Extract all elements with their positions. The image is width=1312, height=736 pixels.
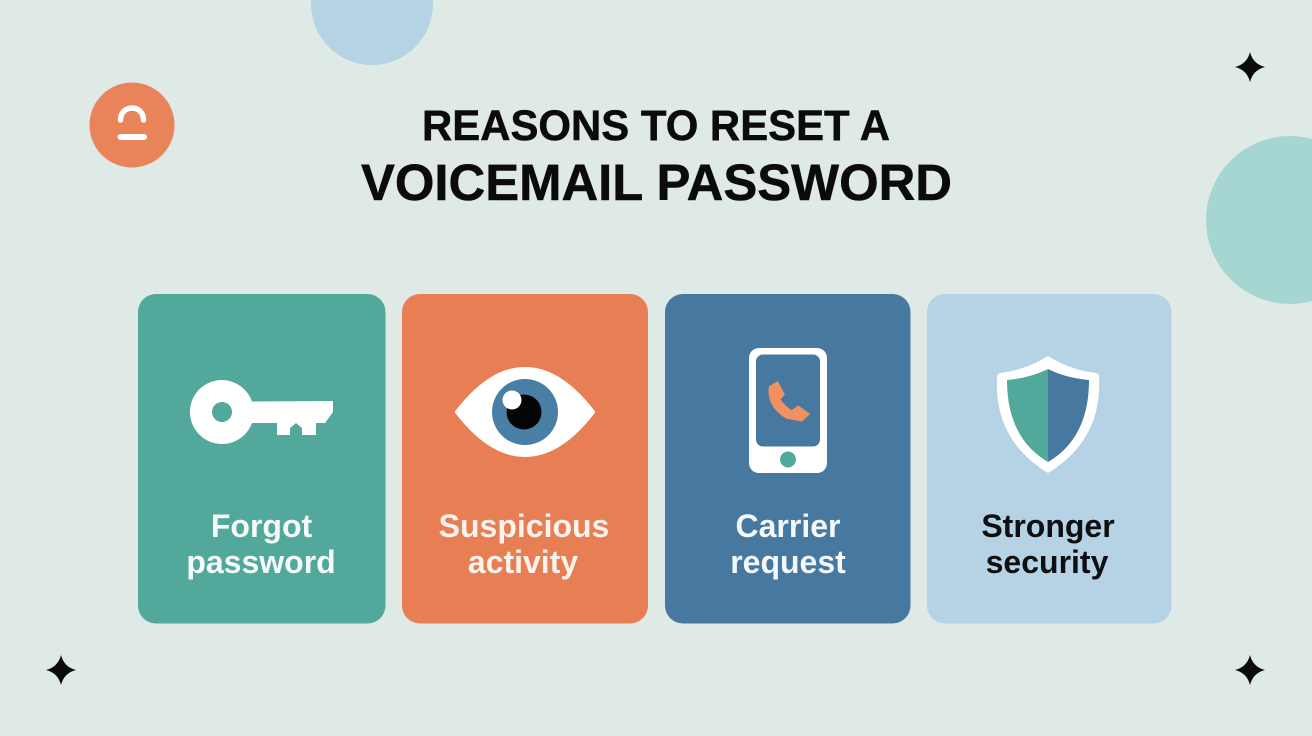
decorative circle: top bbox=[311, 0, 433, 65]
label: forgot password: password bbox=[186, 544, 336, 580]
panel: forgot password bbox=[138, 294, 386, 624]
icon: sparkle bottom left bbox=[46, 655, 76, 685]
label: suspicious activity: activity bbox=[468, 544, 578, 580]
panel: suspicious activity bbox=[402, 294, 648, 624]
icon: key bbox=[190, 380, 333, 444]
icon: sparkle bottom right bbox=[1235, 655, 1265, 685]
icon: phone bbox=[749, 348, 827, 473]
icon: logo badge bbox=[90, 82, 174, 168]
label: forgot password: Forgot bbox=[211, 508, 312, 544]
panel: carrier request bbox=[665, 294, 910, 624]
title bbox=[361, 103, 952, 211]
icon: shield bbox=[997, 356, 1099, 473]
title: REASONS TO RESET A bbox=[422, 103, 890, 150]
label: suspicious activity: Suspicious bbox=[439, 508, 609, 544]
label: stronger security: Stronger bbox=[981, 508, 1115, 544]
label: carrier request: Carrier bbox=[736, 508, 840, 544]
icon: sparkle top right bbox=[1235, 52, 1265, 82]
panel: stronger security bbox=[927, 294, 1172, 624]
label: carrier request: request bbox=[730, 544, 846, 580]
label: stronger security: security bbox=[986, 544, 1109, 580]
decorative circle: right bbox=[1206, 136, 1312, 304]
title: VOICEMAIL PASSWORD bbox=[361, 154, 952, 211]
icon: eye bbox=[457, 369, 593, 455]
